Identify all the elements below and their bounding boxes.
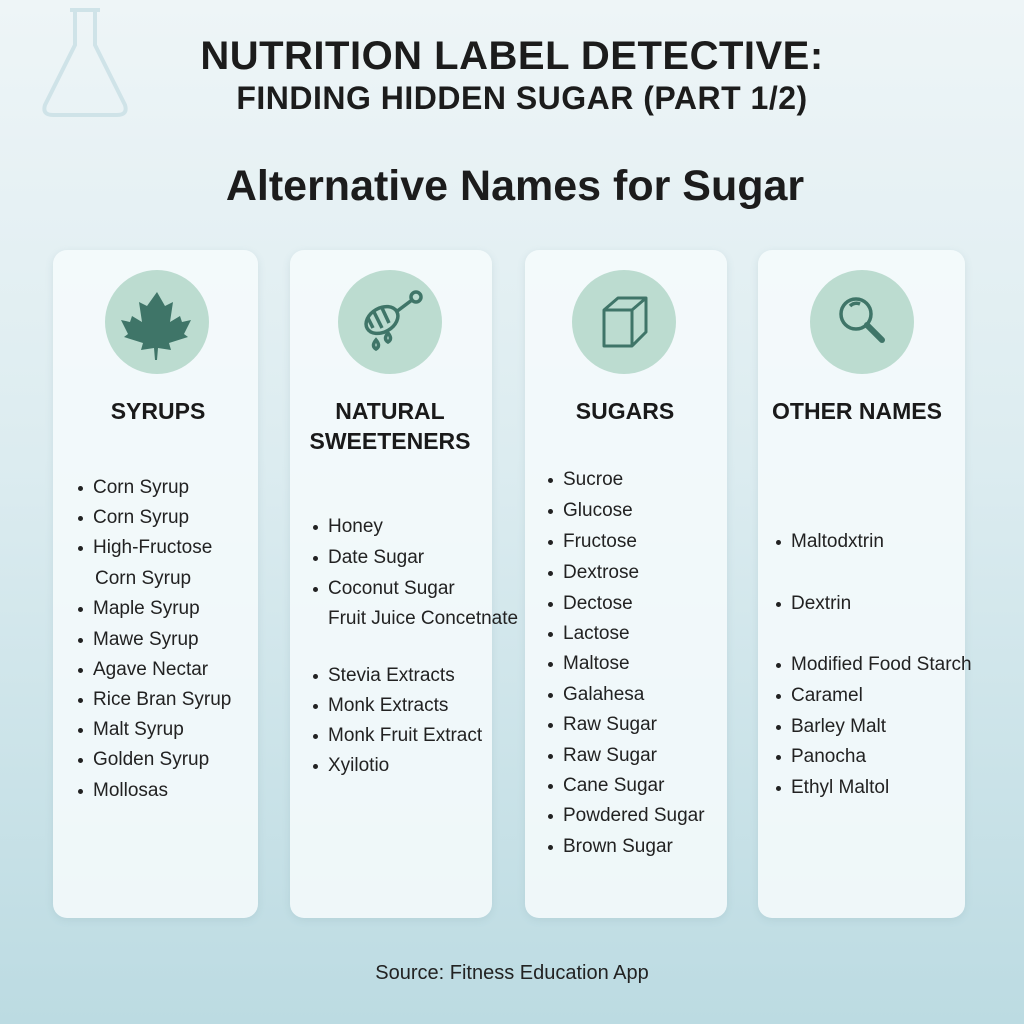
- text: Xyilotio: [328, 755, 389, 776]
- text: Modified Food Starch: [791, 654, 972, 675]
- text: Raw Sugar: [563, 745, 657, 766]
- panel: syrups: [53, 250, 258, 918]
- text: Maple Syrup: [93, 598, 200, 619]
- text: Golden Syrup: [93, 749, 209, 770]
- title: NUTRITION LABEL DETECTIVE:: [200, 34, 824, 78]
- icon: sugar cube: [572, 270, 676, 374]
- source footer: Source: Fitness Education App: [375, 962, 649, 984]
- text: High-Fructose: [93, 537, 212, 558]
- text: Caramel: [791, 685, 863, 706]
- text: Raw Sugar: [563, 714, 657, 735]
- text: Corn Syrup: [93, 507, 189, 528]
- text: Brown Sugar: [563, 836, 673, 857]
- icon: maple leaf: [105, 270, 209, 374]
- text: Stevia Extracts: [328, 665, 455, 686]
- text: Date Sugar: [328, 547, 424, 568]
- text: Rice Bran Syrup: [93, 689, 231, 710]
- text: Malt Syrup: [93, 719, 184, 740]
- heading: natural sweeteners: [309, 398, 471, 454]
- text: Fruit Juice Concetnate: [328, 608, 518, 629]
- text: Galahesa: [563, 684, 644, 705]
- text: Dectose: [563, 593, 633, 614]
- heading: other names: OTHER NAMES: [772, 398, 942, 424]
- text: Cane Sugar: [563, 775, 664, 796]
- text: Corn Syrup: [93, 477, 189, 498]
- heading: natural sweeteners: SWEETENERS: [309, 428, 471, 454]
- icon: magnifier: [810, 270, 914, 374]
- text: Honey: [328, 516, 383, 537]
- text: Dextrin: [791, 593, 851, 614]
- text: Panocha: [791, 746, 866, 767]
- text: Sucroe: [563, 469, 623, 490]
- text: Maltodxtrin: [791, 531, 884, 552]
- title: FINDING HIDDEN SUGAR (PART 1/2): [236, 80, 808, 116]
- text: Fructose: [563, 531, 637, 552]
- panel: sugars: [525, 250, 727, 918]
- text: Agave Nectar: [93, 659, 208, 680]
- text: Glucose: [563, 500, 633, 521]
- text: Mawe Syrup: [93, 629, 199, 650]
- panel: other names: [758, 250, 965, 918]
- text: Ethyl Maltol: [791, 777, 889, 798]
- text: Lactose: [563, 623, 630, 644]
- text: Dextrose: [563, 562, 639, 583]
- list: other names: [776, 531, 972, 798]
- panel: natural sweeteners: [290, 250, 492, 918]
- subtitle: Alternative Names for Sugar: [226, 162, 804, 210]
- icon: honey dipper: [338, 270, 442, 374]
- heading: sugars: SUGARS: [576, 398, 674, 424]
- text: Mollosas: [93, 780, 168, 801]
- text: Coconut Sugar: [328, 578, 455, 599]
- text: Maltose: [563, 653, 630, 674]
- list: sugars: [548, 469, 705, 857]
- heading: natural sweeteners: NATURAL: [335, 398, 445, 424]
- list: syrups: [78, 477, 231, 801]
- decor: flask top-left: [42, 8, 128, 117]
- text: Monk Fruit Extract: [328, 725, 482, 746]
- text: Monk Extracts: [328, 695, 448, 716]
- text: Powdered Sugar: [563, 805, 705, 826]
- text: Corn Syrup: [95, 568, 191, 589]
- text: Barley Malt: [791, 716, 886, 737]
- title: [200, 34, 824, 116]
- list: natural sweeteners: [313, 516, 518, 776]
- heading: syrups: SYRUPS: [111, 398, 205, 424]
